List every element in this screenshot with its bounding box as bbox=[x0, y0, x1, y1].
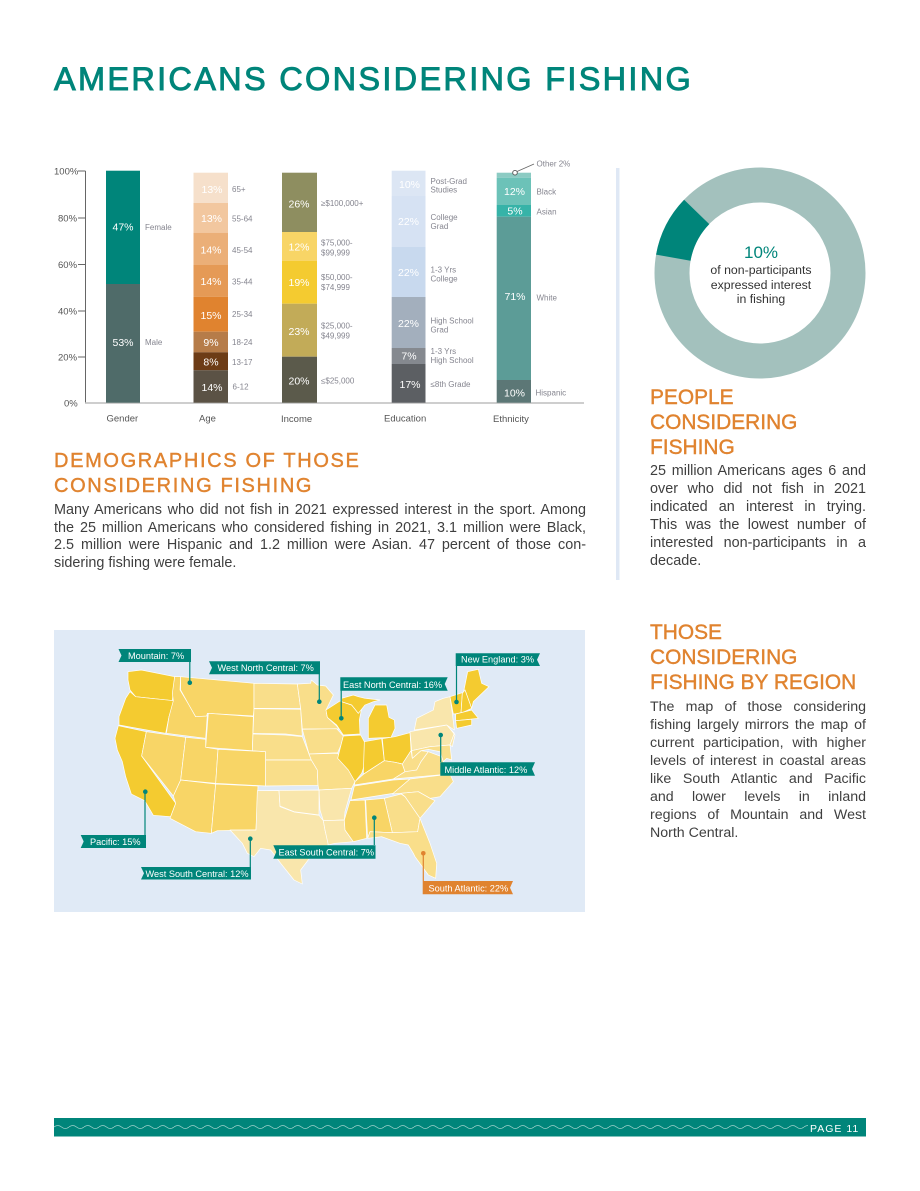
bar: gender: Female bbox=[145, 223, 172, 232]
label: West North Central bbox=[209, 661, 322, 704]
chart axes: 80% bbox=[58, 214, 78, 224]
bar: education: College bbox=[430, 274, 458, 284]
bar: income: 23% bbox=[288, 326, 310, 338]
bar: ethnicity: Other 2% bbox=[536, 160, 570, 168]
bar: age: 14% bbox=[201, 382, 223, 394]
label: Mountain bbox=[118, 649, 192, 685]
label: West South Central: West South Central: 12% bbox=[146, 869, 248, 879]
bar: age: 9% bbox=[203, 337, 219, 349]
text: those considering fishing by region: levels of interest in coastal areas bbox=[650, 753, 866, 769]
bar: age: 13-17 bbox=[232, 358, 253, 367]
heading: people considering fishing bbox=[650, 386, 797, 459]
text: people considering fishing: decade. bbox=[650, 553, 701, 569]
chart axes: 40% bbox=[58, 306, 78, 318]
bar: education: Studies bbox=[430, 186, 457, 194]
heading: demographics bbox=[54, 450, 361, 497]
bar: age: 25-34 bbox=[232, 310, 253, 319]
bar: education: High School bbox=[430, 356, 474, 365]
bar: age: 18-24 bbox=[232, 338, 253, 347]
label: Mountain: Mountain: 7% bbox=[128, 651, 184, 661]
label: New England bbox=[454, 653, 540, 704]
bar: ethnicity: Hispanic bbox=[536, 388, 566, 398]
donut chart: 10 percent bbox=[672, 185, 848, 361]
text: demographics: 2.5 million were Hispanic and 1.2 million were Asian. 47 percent of those con- bbox=[54, 537, 586, 553]
bar: education: Post-Grad bbox=[430, 177, 467, 186]
bar: ethnicity: 5% bbox=[507, 206, 523, 218]
text: demographics: sidering fishing were female. bbox=[54, 555, 236, 571]
bar: education: College bbox=[430, 213, 458, 222]
bar: income: ≤$25,000 bbox=[321, 376, 355, 386]
text: demographics bbox=[54, 502, 586, 571]
text: people considering fishing: over who did not fish in 2021 bbox=[650, 481, 866, 497]
title: AMERICANS CONSIDERING FISHING bbox=[54, 61, 693, 97]
text: those considering fishing by region: like South Atlantic and Pacific bbox=[650, 771, 866, 787]
heading: those considering fishing by region: THOSE bbox=[650, 620, 722, 644]
text: those considering fishing by region: fishing largely mirrors the map of bbox=[650, 717, 866, 733]
label: South Atlantic bbox=[421, 851, 513, 894]
bar: age: 55-64 bbox=[232, 214, 253, 224]
bar: age: 45-54 bbox=[232, 246, 253, 255]
bar: age bbox=[194, 173, 253, 403]
label: West South Central bbox=[141, 836, 253, 880]
bar: income: $99,999 bbox=[321, 248, 350, 258]
text: people considering fishing: indicated an interest in trying. bbox=[650, 499, 866, 515]
label: Pacific: Pacific: 15% bbox=[90, 837, 141, 847]
chart axes bbox=[54, 166, 584, 425]
text: those considering fishing by region: current participation, with higher bbox=[650, 735, 866, 751]
bar: education: Grad bbox=[430, 326, 448, 334]
bar: education: 22% bbox=[398, 318, 419, 330]
chart axes: Age bbox=[199, 414, 216, 424]
donut caption: of non-participants bbox=[710, 263, 812, 277]
bar: age: 15% bbox=[200, 310, 222, 322]
bar: income bbox=[282, 173, 364, 403]
bar: ethnicity: White bbox=[536, 294, 558, 302]
chart axes: 100% bbox=[54, 166, 79, 178]
bar: ethnicity: 12% bbox=[504, 186, 525, 198]
footer bar: PAGE 11 bbox=[810, 1123, 859, 1135]
bar: income: 26% bbox=[288, 198, 310, 210]
heading: those considering fishing by region: CONSIDERING bbox=[650, 646, 797, 669]
bar: income: $75,000- bbox=[321, 238, 353, 248]
label: Middle Atlantic: Middle Atlantic: 12% bbox=[444, 765, 527, 775]
bar: ethnicity: Black bbox=[536, 188, 557, 196]
text: demographics: the 25 million Americans who considered fishing in 2021, 3.1 million were Black, bbox=[54, 520, 586, 536]
bar: age: 35-44 bbox=[232, 278, 253, 286]
bar: age: 13% bbox=[201, 184, 223, 196]
chart axes: 0% bbox=[64, 398, 78, 410]
bar: gender: 53% bbox=[112, 337, 134, 349]
bar: education: Grad bbox=[430, 222, 448, 231]
bar: income: $50,000- bbox=[321, 273, 353, 282]
map: western and central states bbox=[115, 670, 355, 884]
donut caption: in fishing bbox=[737, 292, 785, 306]
bar: education: ≤8th Grade bbox=[430, 380, 471, 389]
text: those considering fishing by region: regions of Mountain and West bbox=[650, 807, 866, 823]
heading: those considering fishing by region bbox=[650, 620, 856, 694]
bar: gender: Male bbox=[145, 338, 163, 347]
heading: people considering fishing: FISHING bbox=[650, 436, 735, 459]
label: Middle Atlantic bbox=[438, 733, 535, 776]
bar: ethnicity bbox=[497, 160, 570, 403]
bar: income: ≥$100,000+ bbox=[321, 199, 364, 208]
footer bar bbox=[54, 1118, 866, 1136]
label: South Atlantic: South Atlantic: 22% bbox=[428, 884, 508, 894]
heading: people considering fishing: CONSIDERING bbox=[650, 411, 797, 434]
label: East South Central bbox=[273, 815, 377, 859]
bar: age: 6-12 bbox=[232, 382, 249, 392]
bar: age: 65+ bbox=[232, 185, 246, 194]
bar: age: 8% bbox=[203, 356, 219, 368]
heading: demographics: CONSIDERING FISHING bbox=[54, 475, 313, 497]
bar: age: 13% bbox=[201, 213, 222, 225]
chart axes: Ethnicity bbox=[493, 414, 529, 425]
bar: age: 14% bbox=[200, 244, 222, 256]
label: New England: New England: 3% bbox=[461, 654, 534, 664]
chart axes: 20% bbox=[58, 352, 78, 364]
bar: gender: 47% bbox=[112, 222, 134, 234]
text: those considering fishing by region: The map of those considering bbox=[650, 699, 866, 715]
bar: education bbox=[392, 171, 474, 403]
text: those considering fishing by region: North Central. bbox=[650, 825, 738, 841]
text: people considering fishing: 25 million Americans ages 6 and bbox=[650, 463, 866, 479]
bar: ethnicity: Asian bbox=[536, 208, 557, 216]
bar: income: $74,999 bbox=[321, 283, 350, 292]
bar: education: High School bbox=[430, 316, 474, 326]
chart axes: 60% bbox=[58, 260, 78, 271]
bar: income: 19% bbox=[288, 277, 310, 289]
bar: education: 22% bbox=[398, 216, 419, 228]
chart axes: Income bbox=[281, 414, 312, 425]
bar: education: 10% bbox=[399, 179, 420, 191]
text: those considering fishing by region: and lower levels in inland bbox=[650, 789, 866, 805]
label: West North Central: West North Central: 7% bbox=[218, 663, 314, 673]
heading: people considering fishing: PEOPLE bbox=[650, 386, 734, 409]
label: East North Central: East North Central: 16% bbox=[343, 680, 442, 690]
donut caption: 10% bbox=[744, 243, 778, 262]
column divider bbox=[616, 168, 620, 580]
label: East North Central bbox=[339, 677, 448, 721]
donut caption: expressed interest bbox=[711, 278, 811, 292]
bar: gender bbox=[106, 171, 172, 403]
bar: age: 14% bbox=[200, 276, 222, 288]
text: people considering fishing bbox=[650, 463, 866, 569]
bar: education: 17% bbox=[399, 379, 421, 391]
bar: income: 12% bbox=[288, 242, 310, 254]
text: people considering fishing: interested non-participants in a bbox=[650, 535, 866, 551]
bar: education: 1-3 Yrs bbox=[430, 347, 456, 356]
map: eastern states bbox=[326, 669, 489, 878]
text: demographics: Many Americans who did not fish in 2021 expressed interest in the sport. Among bbox=[54, 502, 586, 518]
label: Pacific bbox=[81, 789, 148, 848]
text: people considering fishing: This was the lowest number of bbox=[650, 517, 866, 533]
donut caption bbox=[710, 243, 812, 306]
bar: income: 20% bbox=[288, 376, 310, 388]
bar: ethnicity: 71% bbox=[504, 291, 526, 303]
heading: demographics: DEMOGRAPHICS OF THOSE bbox=[54, 450, 361, 472]
map panel bbox=[54, 630, 585, 912]
label: East South Central: East South Central: 7% bbox=[278, 848, 374, 858]
bar: education: 7% bbox=[401, 350, 417, 362]
bar: income: $49,999 bbox=[321, 332, 350, 340]
chart axes: Education bbox=[384, 414, 426, 424]
bar: education: 1-3 Yrs bbox=[430, 266, 456, 274]
bar: education: 22% bbox=[398, 267, 419, 279]
bar: ethnicity: 10% bbox=[504, 388, 525, 400]
heading: those considering fishing by region: FISHING BY REGION bbox=[650, 671, 856, 694]
text: those considering fishing by region bbox=[650, 699, 866, 841]
chart axes: Gender bbox=[106, 414, 138, 424]
bar: income: $25,000- bbox=[321, 322, 353, 330]
